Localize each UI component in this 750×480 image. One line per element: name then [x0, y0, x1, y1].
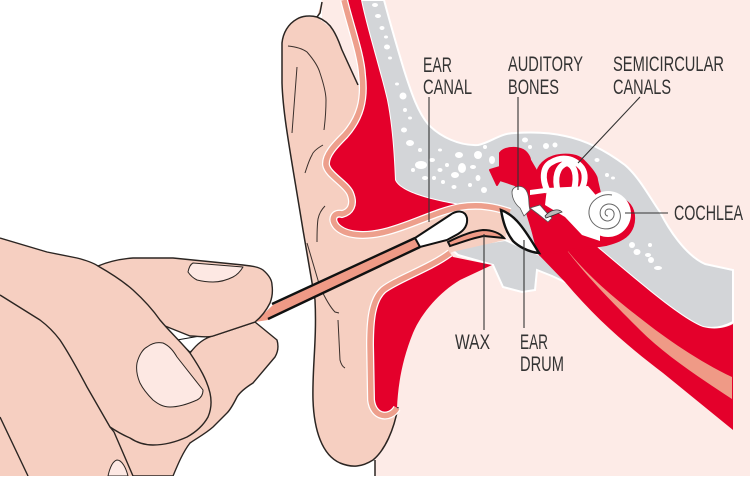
fingernail, upper [188, 263, 243, 282]
skin: ear [282, 0, 510, 466]
eustachian tube [527, 203, 733, 430]
thumb and palm [0, 238, 211, 476]
cotton swab [255, 212, 467, 322]
eardrum [501, 210, 539, 253]
label: ear canal [423, 54, 472, 99]
label: auditory bones: BONES [508, 76, 559, 99]
ear canal lining, upper [326, 0, 510, 235]
hand [0, 238, 278, 476]
inner ear labyrinth [530, 159, 631, 241]
grey temporal bone, lower [450, 240, 572, 292]
bone pores [372, 3, 662, 270]
label: semicircular canals: CANALS [613, 76, 671, 99]
label: ear canal: EAR [423, 54, 452, 77]
background panel [322, 0, 750, 476]
label: semicircular canals [613, 53, 724, 99]
white strip below the drawing [0, 476, 750, 480]
thumbnail [137, 343, 203, 407]
ear canal lining, lower [370, 253, 450, 416]
ear outline [282, 2, 398, 476]
auditory bones [512, 186, 562, 222]
ear fold lines [288, 46, 345, 368]
leader lines [429, 97, 668, 330]
label: auditory bones: AUDITORY [508, 53, 583, 76]
cochlea spiral [589, 195, 620, 229]
upper finger [98, 258, 272, 337]
red tissue, upper [326, 0, 460, 235]
lower finger [100, 322, 278, 476]
fingernail, bottom [108, 460, 128, 476]
label: auditory bones [508, 53, 583, 99]
label: ear canal: CANAL [423, 76, 472, 99]
swab end behind fingers [177, 336, 208, 352]
label: ear drum: EAR [520, 331, 548, 354]
label: ear drum: DRUM [520, 353, 564, 376]
label: wax: WAX [455, 331, 490, 354]
red tissue, lower [370, 253, 492, 416]
grey temporal bone, upper [361, 0, 733, 328]
finger creases [0, 295, 133, 476]
label: ear drum [520, 331, 564, 376]
wax [448, 230, 504, 246]
inner ear red surround [490, 148, 634, 255]
